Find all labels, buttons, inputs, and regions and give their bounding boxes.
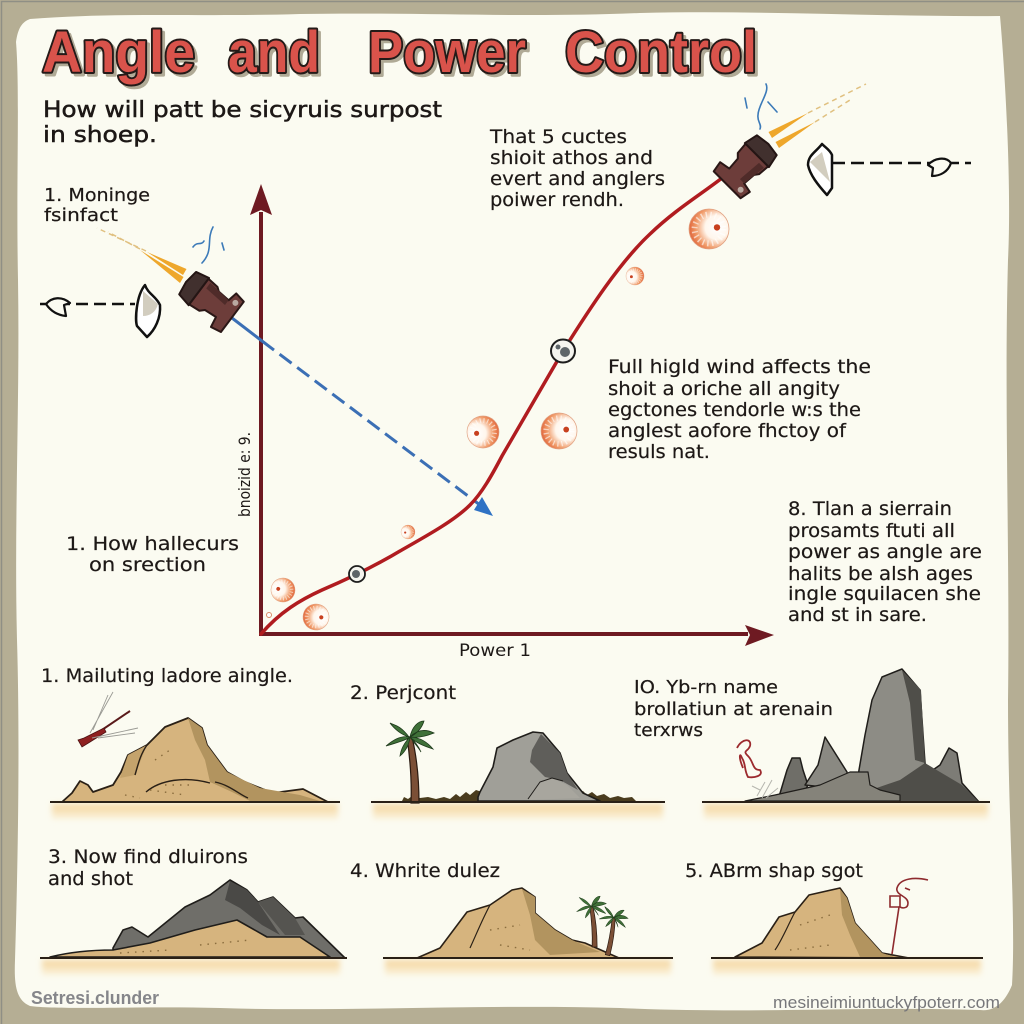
note: cuctes: shioit athos and <box>490 147 653 169</box>
right dashed aim line <box>832 159 971 176</box>
note: cuctes <box>489 126 665 211</box>
icon: right cannon <box>712 84 971 200</box>
label: mailuting: 1. Mailuting ladore aingle. <box>41 665 293 687</box>
left flames <box>97 228 186 283</box>
ground line <box>711 957 983 959</box>
title: Control <box>565 20 757 85</box>
ground glow <box>704 804 988 819</box>
scene 2: palm and grey rock <box>371 721 665 819</box>
red power curve <box>261 178 722 634</box>
note: hallecurs <box>66 533 239 576</box>
note: moninge <box>44 185 150 226</box>
ground line <box>702 801 990 803</box>
bush sketch <box>752 780 778 798</box>
title: Angle <box>42 20 195 85</box>
note: moninge: 1. Moninge <box>44 185 150 206</box>
sand hill <box>62 718 328 802</box>
note: wind: Full higld wind affects the <box>608 356 871 378</box>
ground glow <box>52 804 338 819</box>
rock spires <box>745 669 979 802</box>
note: sierrain: power as angle are <box>788 541 982 563</box>
scene 6: sand peak with flag <box>711 879 983 975</box>
label: whrite dulez: 4. Whrite dulez <box>350 860 500 882</box>
note: cuctes: evert and anglers <box>490 168 665 190</box>
scene 5: sand hill with palms <box>383 888 673 975</box>
left dashed aim line <box>40 298 135 316</box>
y axis label: bnoizid e: 9. <box>235 432 254 517</box>
note: hallecurs: on srection <box>89 554 206 576</box>
ground line <box>383 957 673 959</box>
chart: angle vs power <box>232 178 774 661</box>
sand hill <box>417 888 619 958</box>
note: sierrain: prosamts ftuti all <box>788 520 955 542</box>
note: sierrain: halits be alsh ages <box>788 563 973 585</box>
subtitle: How will patt be sicyruis surpost <box>43 98 442 123</box>
note: cuctes: poiwer rendh. <box>490 189 624 211</box>
red marker glyph <box>737 740 761 777</box>
grey hills <box>50 880 345 958</box>
ground line <box>371 801 665 803</box>
note: hallecurs: 1. How hallecurs <box>66 533 239 555</box>
note: sierrain <box>788 498 982 626</box>
red flag marker <box>890 879 928 954</box>
ground glow <box>385 960 671 975</box>
title: Power <box>371 23 529 88</box>
title: and <box>231 23 323 88</box>
y axis <box>250 184 272 636</box>
sand foreground <box>50 920 330 957</box>
sand peak <box>735 888 909 958</box>
note: wind: egctones tendorle w:s the <box>608 399 861 421</box>
title: and <box>228 20 320 85</box>
note: wind <box>608 356 871 463</box>
left wind marks <box>193 227 224 263</box>
x axis <box>259 625 774 646</box>
label: yb-rn name: IO. Yb-rn name <box>634 677 778 698</box>
note: wind: resuls nat. <box>608 441 710 463</box>
label: yb-rn name: brollatiun at arenain <box>634 699 833 720</box>
scene 1: sand hill with dart <box>50 692 340 819</box>
ground line <box>50 801 340 803</box>
title: Control <box>568 23 760 88</box>
curve marker low <box>349 566 365 582</box>
label: perjcont: 2. Perjcont <box>350 682 456 704</box>
right rock target <box>808 144 832 195</box>
note: sierrain: 8. Tlan a sierrain <box>788 498 952 520</box>
subtitle <box>43 98 442 148</box>
grass tufts <box>402 790 636 801</box>
subtitle: in shoep. <box>43 123 157 148</box>
curve marker high <box>551 340 575 362</box>
ground glow <box>42 960 340 975</box>
label: yb-rn name <box>634 677 833 741</box>
scene 3: tall rock spires <box>702 669 990 819</box>
note: sierrain: and st in sare. <box>788 604 927 626</box>
label: now find: and shot <box>48 868 133 890</box>
palm tree <box>386 721 434 803</box>
data balls <box>266 209 729 633</box>
grey rock <box>478 732 600 801</box>
ground glow <box>713 960 981 975</box>
label: now find: 3. Now find dluirons <box>48 846 248 868</box>
label: abrm shap: 5. ABrm shap sgot <box>685 860 863 882</box>
note: wind: shoit a oriche all angity <box>608 378 840 400</box>
label: yb-rn name: terxrws <box>634 720 703 741</box>
title: Power <box>368 20 526 85</box>
label: now find <box>48 846 248 890</box>
scene 4: sand over grey hills <box>40 880 347 975</box>
blue dashed trajectory <box>232 318 493 516</box>
ground line <box>40 957 347 959</box>
right wind marks <box>745 84 777 129</box>
note: sierrain: ingle squilacen she <box>788 583 981 605</box>
icon: left cannon <box>40 227 245 337</box>
right flames <box>768 84 866 148</box>
palm trees <box>577 896 630 958</box>
title: Angle <box>45 23 198 88</box>
ground glow <box>373 804 663 819</box>
footer left: Setresi.clunder <box>31 988 159 1008</box>
left rock target <box>136 285 160 337</box>
x axis label: Power 1 <box>459 641 531 661</box>
note: moninge: fsinfact <box>44 205 118 226</box>
title <box>42 20 760 88</box>
footer right: mesineimiuntuckyfpoterr.com <box>773 993 1000 1012</box>
note: wind: anglest aofore fhctoy of <box>608 420 847 442</box>
note: cuctes: That 5 cuctes <box>489 126 627 148</box>
dart icon <box>78 692 138 747</box>
